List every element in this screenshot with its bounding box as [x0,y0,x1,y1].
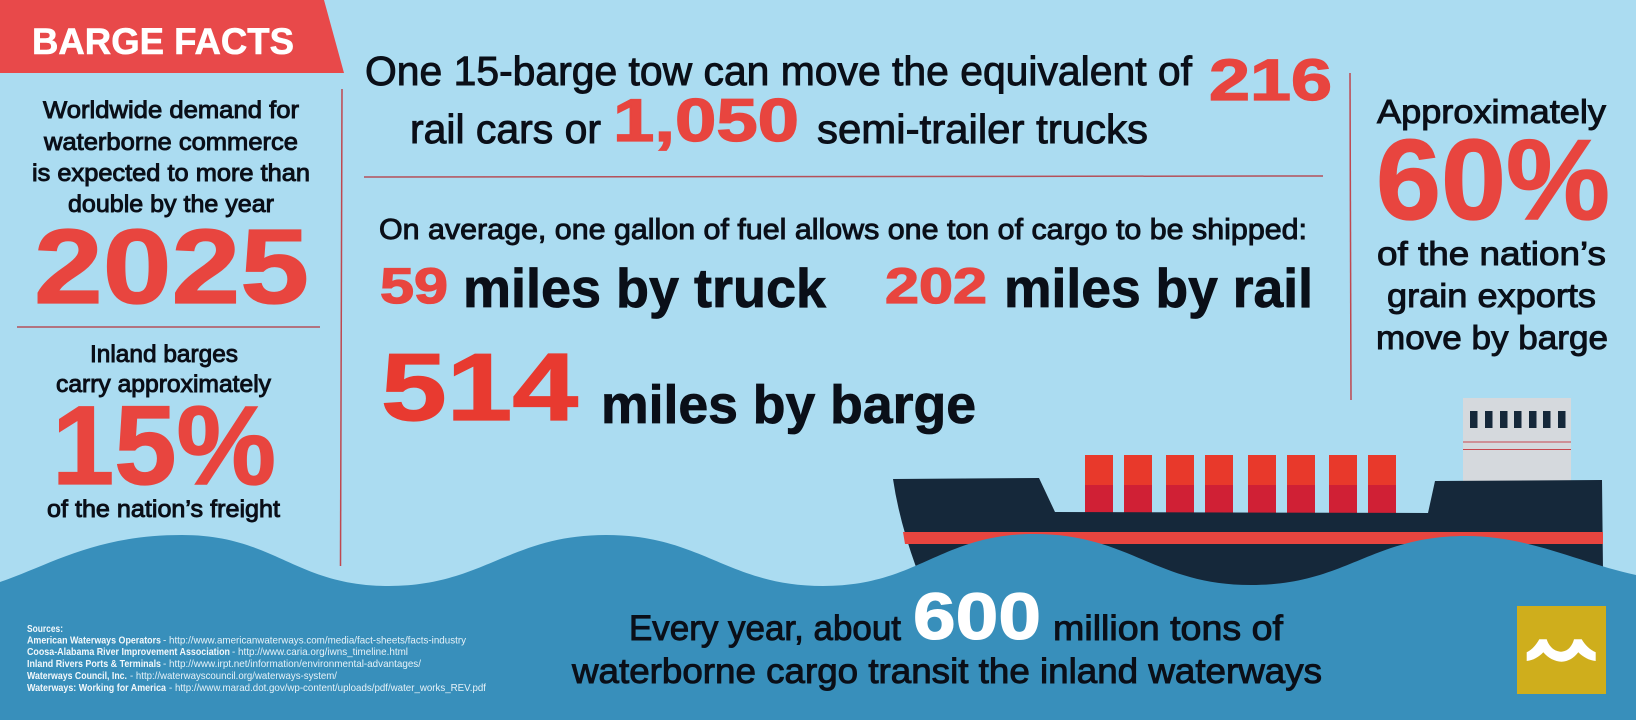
text block: fuel efficiency by truck, rail and barge: miles by rail [1004,257,1313,319]
text block: waterborne commerce demand 2025: Worldwide demand for [43,97,299,124]
heading banner: Barge Facts: BARGE FACTS [32,21,294,62]
text block: tow equivalent 216 rail cars or 1,050 trucks: 1,050 [613,87,799,154]
text block: 600 million tons: million tons of [1053,609,1283,648]
text block: 60% of grain exports: move by barge [1376,319,1608,356]
text block: waterborne commerce demand 2025 [32,97,310,326]
ship funnel [1463,398,1571,482]
sources list: Sources: [27,623,63,635]
sources list: Waterways Council, Inc. [27,670,127,682]
text block: 60% of grain exports [1376,93,1610,356]
sources list: - http://www.irpt.net/information/environmental-advantages/ [163,658,421,670]
text block: 600 million tons: 600 [913,579,1041,653]
sources list: - http://www.americanwaterways.com/media/fact-sheets/facts-industry [163,634,467,646]
text block: waterborne commerce demand 2025: 2025 [34,208,309,326]
sources list: Coosa-Alabama River Improvement Association [27,646,230,658]
ship illustration [893,398,1603,620]
sources list: - http://www.caria.org/iwns_timeline.html [232,646,408,658]
water waves [0,534,1636,720]
ship hull [893,478,1603,620]
hull stripe [903,532,1603,544]
text block: tow equivalent 216 rail cars or 1,050 trucks: semi-trailer trucks [817,106,1148,152]
text block: fuel efficiency by truck, rail and barge: 59 [380,258,448,314]
logo: gold square with white waves [1517,606,1606,694]
text block: fuel efficiency by truck, rail and barge: miles by barge [601,375,976,435]
text block: waterborne commerce demand 2025: is expected to more than [32,160,310,187]
text block: inland barges carry 15% of freight: of the nation’s freight [47,496,280,523]
text block: fuel efficiency by truck, rail and barge: On average, one gallon of fuel allows one ton of cargo to be shipped: [379,214,1307,246]
text block: 60% of grain exports: Approximately [1377,93,1607,130]
text block: 60% of grain exports: 60% [1376,117,1610,244]
text block: 600 million tons [571,579,1322,691]
text block: 600 million tons: Every year, about [629,609,901,648]
text block: tow equivalent 216 rail cars or 1,050 trucks: rail cars or [410,106,601,152]
text block: inland barges carry 15% of freight: carry approximately [56,371,272,398]
sources list: American Waterways Operators [27,634,161,646]
text block: 60% of grain exports: of the nation’s [1377,235,1606,272]
text block: inland barges carry 15% of freight: 15% [52,383,276,508]
heading banner: Barge Facts [0,0,344,73]
sources list: Waterways: Working for America [27,682,166,694]
text block: inland barges carry 15% of freight: Inland barges [90,341,238,368]
text block: 60% of grain exports: grain exports [1387,277,1596,314]
text block: fuel efficiency by truck, rail and barge: 514 [381,334,578,441]
text block: fuel efficiency by truck, rail and barge [379,214,1313,441]
sources list: - http://www.marad.dot.gov/wp-content/uploads/pdf/water_works_REV.pdf [169,682,486,694]
text block: fuel efficiency by truck, rail and barge: miles by truck [463,257,826,319]
text block: inland barges carry 15% of freight [47,341,280,523]
text block: fuel efficiency by truck, rail and barge: 202 [885,258,987,314]
text block: tow equivalent 216 rail cars or 1,050 trucks: 216 [1209,48,1332,113]
sources list [27,623,486,694]
text block: tow equivalent 216 rail cars or 1,050 trucks: One 15-barge tow can move the equivalent of [365,48,1193,94]
text block: waterborne commerce demand 2025: waterborne commerce [43,129,298,156]
text block: waterborne commerce demand 2025: double by the year [68,191,274,218]
text block: 600 million tons: waterborne cargo transit the inland waterways [571,652,1322,691]
sources list: Inland Rivers Ports & Terminals [27,658,161,670]
sources list: - http://waterwayscouncil.org/waterways-system/ [130,670,337,682]
text block: tow equivalent 216 rail cars or 1,050 trucks [365,48,1332,154]
cargo containers [1085,455,1396,513]
